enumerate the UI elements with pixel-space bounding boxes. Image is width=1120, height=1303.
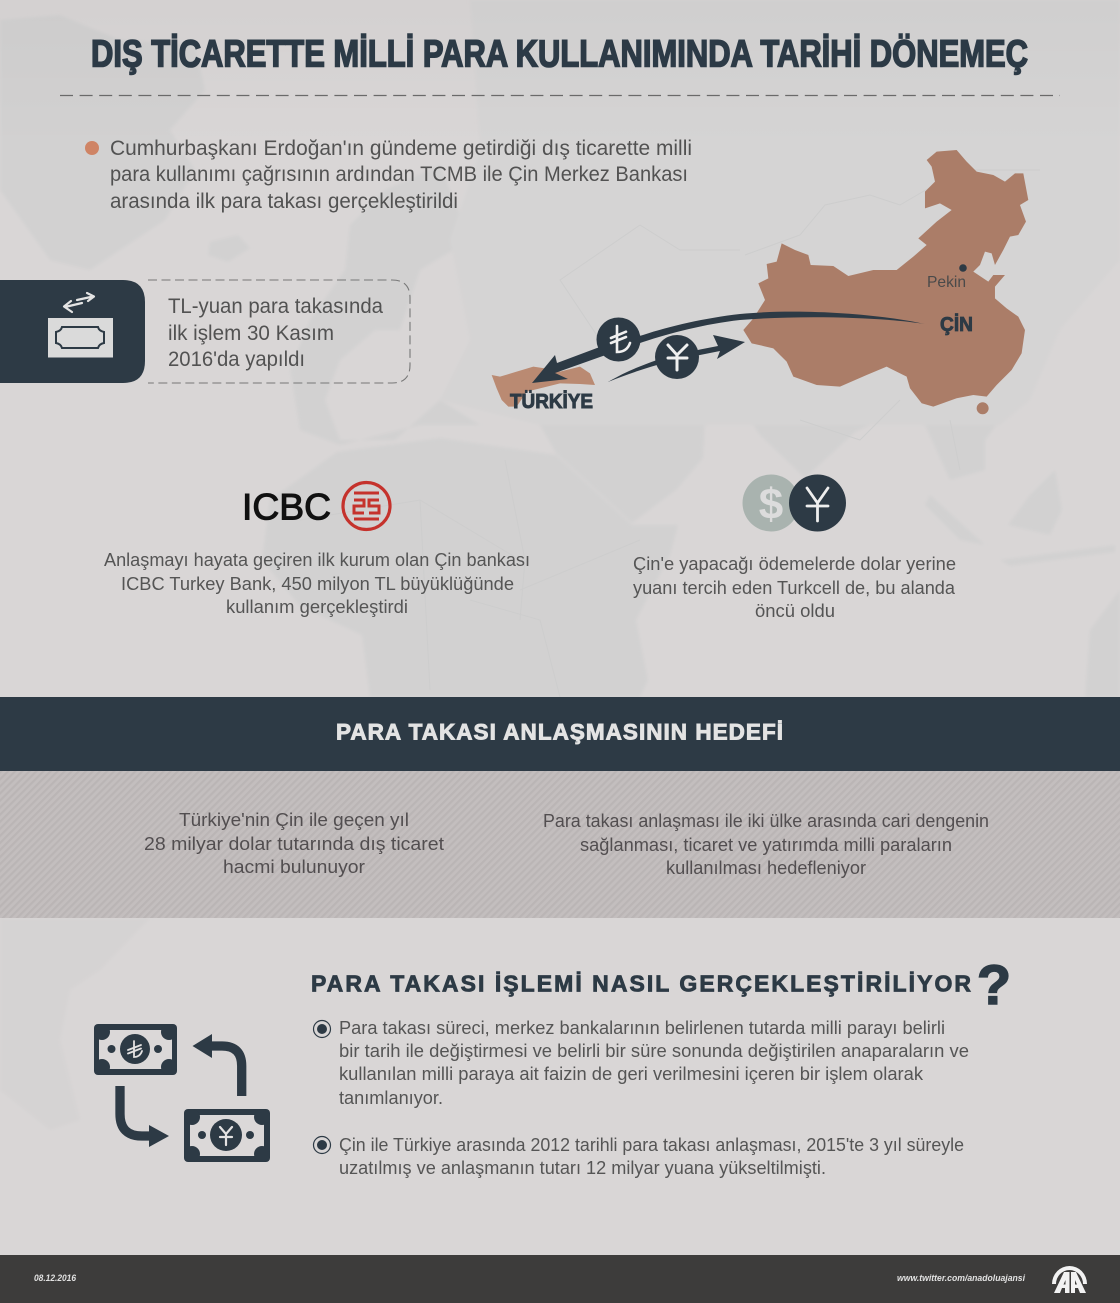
title divider: [60, 94, 1060, 96]
left goal text: 28 milyar dolar tutarında dış ticaret: [144, 833, 444, 854]
lira banknote: [94, 1024, 177, 1075]
arrow: up and left: [192, 1034, 242, 1096]
map: China and Turkey: [492, 150, 1028, 414]
icon: exchange arrows: [64, 293, 94, 312]
arrow: China to Turkey: [532, 312, 925, 383]
callout text: 2016'da yapıldı: [168, 348, 305, 371]
Turkcell text: öncü oldu: [755, 600, 835, 621]
heading: how the swap works: PARA TAKASI İŞLEMİ NASIL GERÇEKLEŞTİRİLİYOR: [311, 970, 971, 996]
banner: goal of the swap agreement: [0, 697, 1120, 771]
icon: yuan coin: [655, 335, 699, 379]
Beijing marker: [959, 264, 967, 272]
callout text: ilk işlem 30 Kasım: [168, 322, 334, 345]
ICBC text: ICBC Turkey Bank, 450 milyon TL büyüklüğünde: [121, 573, 514, 594]
left goal text: [144, 809, 444, 877]
bullet: [314, 1020, 330, 1038]
logo: ICBC: [242, 482, 390, 530]
callout text: [168, 295, 383, 371]
paragraph: kullanılan milli paraya ait faizin de geri verilmesini içeren bir işlem olarak: [339, 1063, 924, 1084]
right goal text: kullanılması hedefleniyor: [666, 857, 866, 878]
intro text block: [85, 137, 692, 213]
label: Türkiye: TÜRKİYE: [510, 390, 593, 413]
panel: first transaction callout: [0, 280, 410, 383]
ICBC text: Anlaşmayı hayata geçiren ilk kurum olan Çin bankası: [104, 549, 530, 570]
first explanation item: [314, 1017, 969, 1108]
ICBC wordmark: ICBC: [242, 486, 331, 528]
intro paragraph: Cumhurbaşkanı Erdoğan'ın gündeme getirdiği dış ticarette milli: [110, 137, 692, 160]
paragraph: [339, 1134, 964, 1178]
ICBC text: kullanım gerçekleştirdi: [226, 596, 408, 617]
Turkcell text: Çin'e yapacağı ödemelerde dolar yerine: [633, 553, 956, 574]
bullet dot: [85, 141, 99, 155]
Turkey shape: [492, 367, 595, 407]
paragraph: Para takası süreci, merkez bankalarının belirlenen tutarda milli parayı belirli: [339, 1017, 945, 1038]
panel: striped goals: [0, 771, 1120, 918]
icon: AA logo: [1052, 1266, 1087, 1293]
icon: lira coin: [596, 318, 640, 362]
callout text: TL-yuan para takasında: [168, 295, 383, 318]
dashed text frame: [148, 280, 410, 383]
label: Çin: ÇİN: [940, 313, 973, 336]
label: Pekin: Pekin: [927, 274, 966, 291]
icon: currency exchange cycle: [94, 1024, 270, 1162]
icon: dollar and yuan coins: $: [759, 480, 783, 529]
Turkcell text: [633, 553, 956, 621]
date: 08.12.2016: [34, 1273, 77, 1284]
ICBC text: [104, 549, 530, 617]
Turkcell text: yuanı tercih eden Turkcell de, bu alanda: [633, 577, 956, 598]
icon: banknote: [48, 318, 113, 358]
right goal text: sağlanması, ticaret ve yatırımda milli paraların: [580, 834, 952, 855]
arrow: Turkey to China: [608, 335, 745, 382]
footer: [0, 1255, 1120, 1303]
paragraph: Çin ile Türkiye arasında 2012 tarihli para takası anlaşması, 2015'te 3 yıl süreyle: [339, 1134, 964, 1155]
icon: dollar and yuan coins: [742, 474, 846, 532]
banner: goal of the swap agreement: PARA TAKASI ANLAŞMASININ HEDEFİ: [336, 720, 783, 744]
arrow: down and right: [120, 1086, 169, 1147]
intro paragraph: arasında ilk para takası gerçekleştirildi: [110, 190, 458, 213]
paragraph: tanımlanıyor.: [339, 1087, 443, 1108]
right goal text: Para takası anlaşması ile iki ülke arasında cari dengenin: [543, 810, 989, 831]
left goal text: Türkiye'nin Çin ile geçen yıl: [179, 809, 409, 830]
ICBC emblem: [343, 482, 390, 530]
paragraph: [339, 1017, 969, 1108]
heading: how the swap works: [311, 953, 1011, 1016]
twitter URL: www.twitter.com/anadoluajansi: [897, 1273, 1025, 1284]
paragraph: bir tarih ile değiştirmesi ve belirli bir süre sonunda değiştirilen anaparaların ve: [339, 1040, 969, 1061]
second explanation item: [314, 1134, 964, 1178]
left goal text: hacmi bulunuyor: [223, 856, 365, 877]
dark icon tab: [0, 280, 145, 383]
yuan banknote: [184, 1109, 270, 1162]
icon: question mark: ?: [977, 953, 1011, 1016]
paragraph: uzatılmış ve anlaşmanın tutarı 12 milyar yuana yükseltilmişti.: [339, 1157, 826, 1178]
right goal text: [543, 810, 989, 878]
intro paragraph: [110, 137, 692, 213]
China shape: [743, 150, 1028, 414]
intro paragraph: para kullanımı çağrısının ardından TCMB ile Çin Merkez Bankası: [110, 163, 688, 186]
bullet: [314, 1136, 330, 1154]
